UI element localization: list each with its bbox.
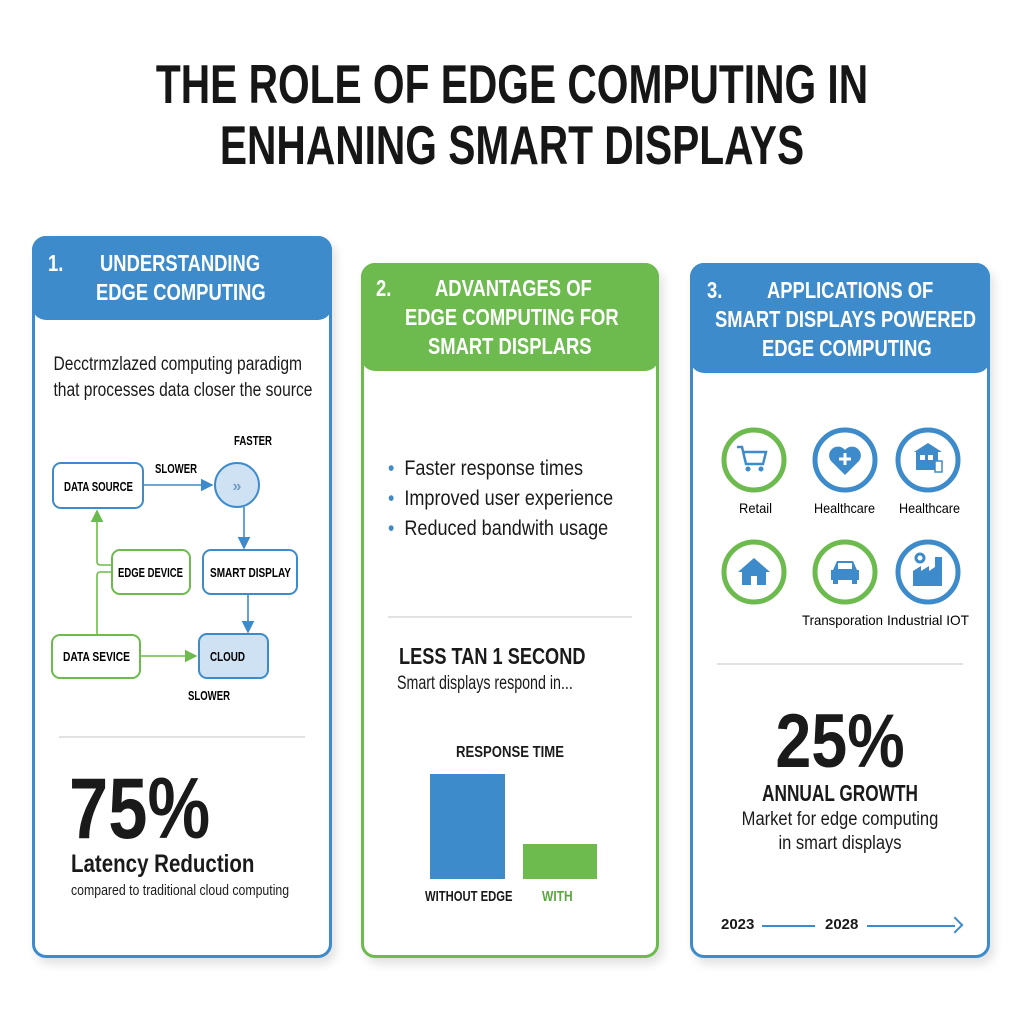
heading: less tan 1 second: LESS TAN 1 SECOND — [399, 643, 585, 669]
timeline arrow: 2023 — [721, 916, 754, 933]
heading bar: panel 1 — [32, 236, 332, 320]
icon: healthcare heart — [814, 430, 875, 516]
node: data source: DATA SOURCE — [64, 479, 133, 494]
text: definition: Decctrmzlazed computing paradigm — [53, 354, 302, 375]
heading bar: panel 2 — [361, 263, 659, 371]
icon: industrial iot: Industrial IOT — [887, 612, 969, 628]
text: ADVANTAGES OF — [435, 275, 592, 301]
icon: healthcare building — [898, 430, 960, 516]
text: definition — [53, 354, 312, 401]
timeline arrow — [721, 916, 964, 934]
node: edge device: EDGE DEVICE — [118, 565, 183, 580]
timeline arrow: 2028 — [825, 916, 858, 933]
icon: retail: Retail — [739, 500, 772, 516]
text: APPLICATIONS OF — [767, 277, 933, 303]
heading: panel 2 — [376, 275, 619, 359]
list: advantages: • Faster response times — [388, 457, 583, 480]
diagram: data flow: SLOWER — [188, 688, 230, 703]
title: THE ROLE OF EDGE COMPUTING IN — [156, 53, 868, 115]
node: data source — [53, 463, 143, 508]
icon: transportation: Transporation — [802, 612, 883, 628]
text: SMART DISPLAYS POWERED — [715, 306, 976, 332]
text: annual growth: ANNUAL GROWTH — [762, 780, 918, 806]
title: ENHANING SMART DISPLAYS — [220, 114, 804, 176]
node: faster circle — [215, 463, 259, 507]
heading: panel 3 — [707, 277, 976, 361]
text: market: in smart displays — [778, 833, 902, 854]
text: respond: Smart displays respond in... — [397, 673, 573, 694]
bar chart: response time: RESPONSE TIME — [456, 744, 564, 761]
node: faster circle: » — [233, 478, 242, 495]
text: latency reduction: Latency Reduction — [71, 850, 254, 878]
node: cloud: CLOUD — [210, 649, 245, 664]
bar chart: response time: WITH — [542, 888, 573, 905]
list: advantages — [388, 457, 613, 540]
diagram: data flow: SLOWER — [155, 461, 197, 476]
panel: advantages — [361, 263, 659, 958]
list: advantages: • Reduced bandwith usage — [388, 517, 608, 540]
text: definition: that processes data closer the source — [53, 380, 312, 401]
icon: home — [724, 542, 784, 602]
text: EDGE COMPUTING — [762, 335, 932, 361]
icons: application icons — [722, 428, 969, 628]
heading bar: panel 3 — [690, 263, 990, 373]
panel: applications — [690, 263, 990, 958]
icon: healthcare heart: Healthcare — [814, 500, 875, 516]
text: EDGE COMPUTING — [96, 279, 266, 305]
title — [156, 53, 868, 176]
bar chart: response time: WITHOUT EDGE — [425, 888, 513, 905]
node: smart display — [203, 550, 297, 594]
text: compared: compared to traditional cloud computing — [71, 882, 289, 899]
node: data sevice — [52, 635, 140, 678]
text: UNDERSTANDING — [100, 250, 260, 276]
icon: industrial iot — [887, 542, 969, 628]
arrows — [97, 485, 248, 656]
heading: panel 1 — [48, 250, 266, 305]
node: smart display: SMART DISPLAY — [210, 565, 291, 580]
text: market: Market for edge computing — [742, 809, 938, 830]
text: SMART DISPLARS — [428, 333, 592, 359]
icon: healthcare building: Healthcare — [899, 500, 960, 516]
text: 1. — [48, 250, 63, 276]
text: 2. — [376, 275, 391, 301]
node: cloud — [199, 634, 268, 678]
node: data sevice: DATA SEVICE — [63, 649, 130, 664]
bar chart: response time — [425, 744, 597, 905]
text: 3. — [707, 277, 722, 303]
diagram: data flow — [51, 433, 298, 703]
stat: 25%: 25% — [775, 699, 905, 784]
panel: understanding edge computing — [32, 236, 332, 958]
node: edge device — [112, 550, 190, 594]
stat: 75%: 75% — [69, 761, 210, 857]
text: EDGE COMPUTING FOR — [405, 304, 619, 330]
icon: retail — [724, 430, 784, 516]
diagram: data flow: FASTER — [234, 433, 272, 448]
text: market — [742, 809, 938, 854]
list: advantages: • Improved user experience — [388, 487, 613, 510]
icon: transportation — [802, 542, 883, 628]
